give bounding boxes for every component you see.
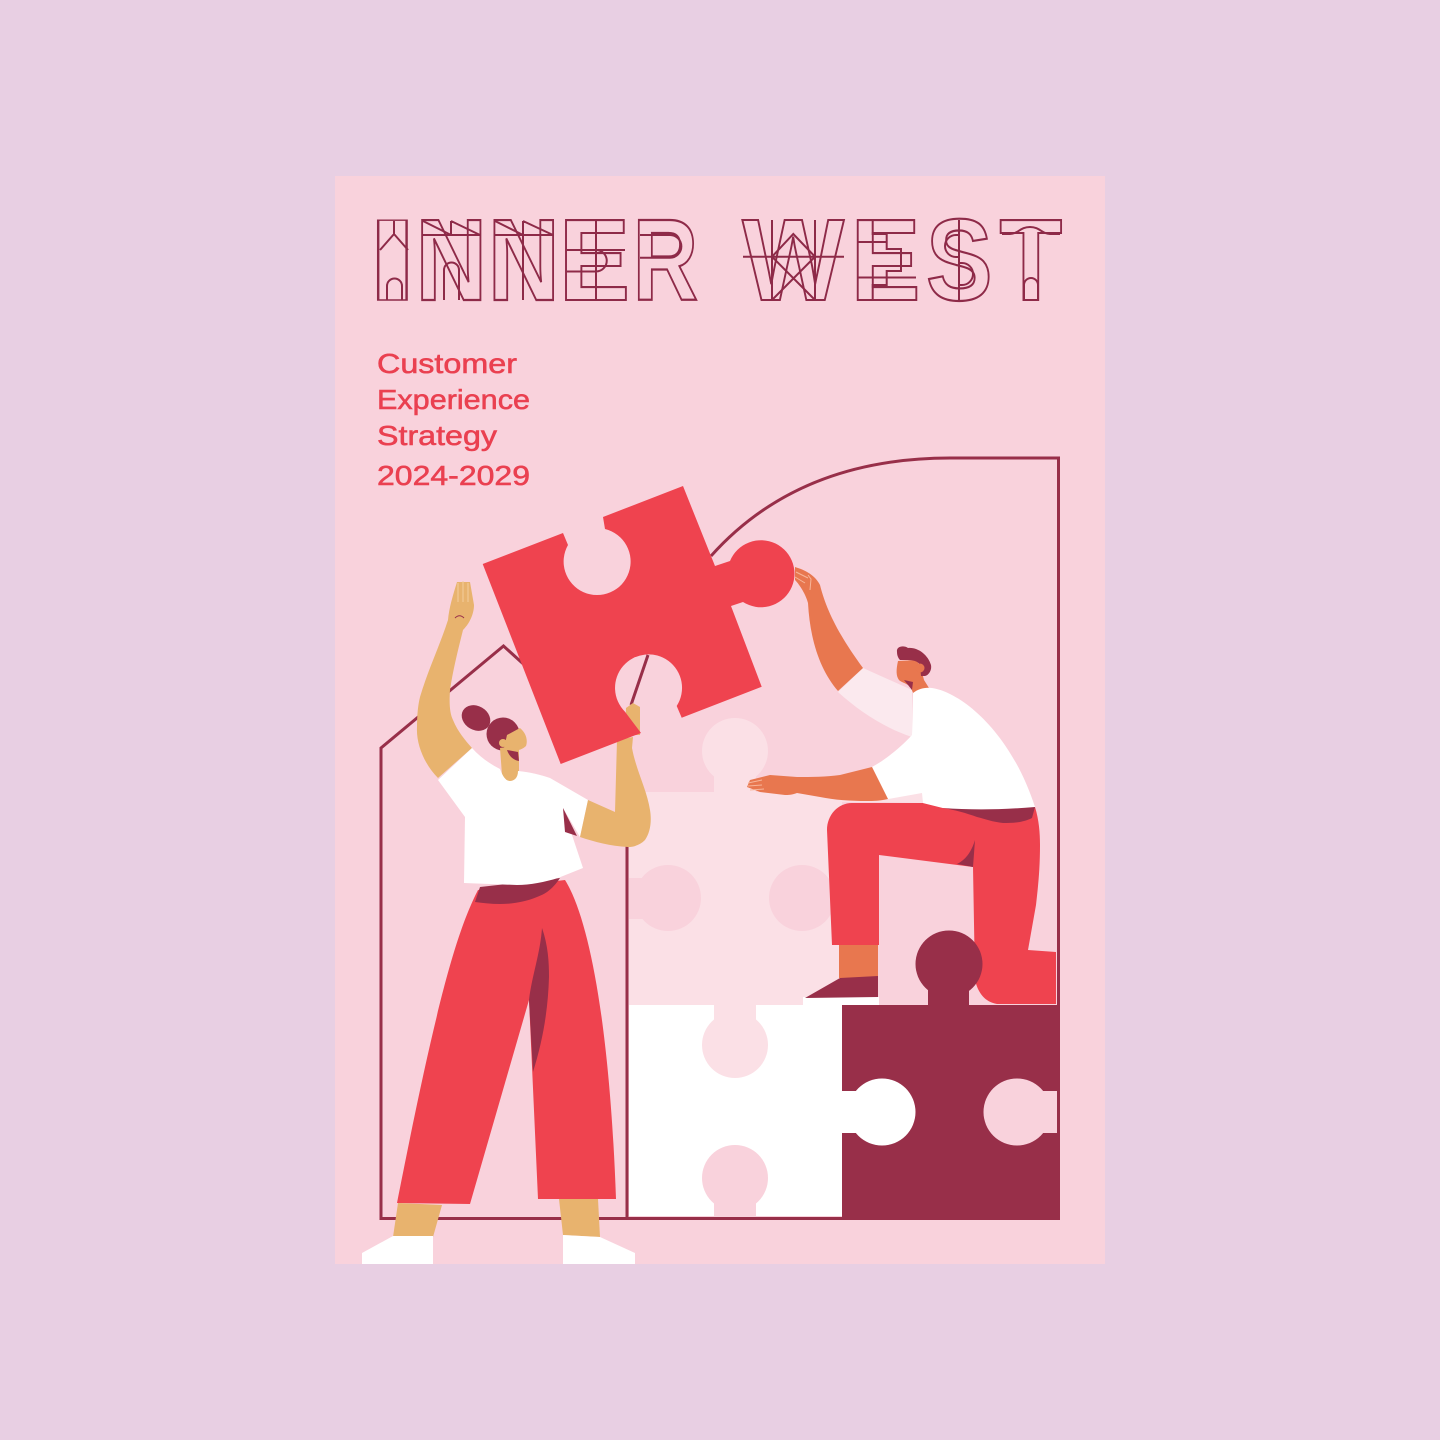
woman: raised arm <box>417 582 474 778</box>
puzzle piece: maroon <box>842 930 1060 1220</box>
title word: INNER <box>365 195 698 326</box>
woman <box>362 581 651 1264</box>
man: hand details <box>795 572 811 590</box>
woman: left ankle <box>393 1203 442 1237</box>
house outlines <box>381 458 1058 1219</box>
outline: gabled house <box>381 646 1058 1218</box>
man: pale shirt underside <box>885 792 923 803</box>
man: trouser fold <box>957 840 975 867</box>
subtitle: Customer <box>377 348 517 379</box>
title ornaments: WEST <box>743 220 1060 300</box>
woman: hair bun <box>457 700 495 736</box>
title word: WEST <box>742 195 1062 325</box>
puzzle piece: red lifted <box>483 486 794 764</box>
puzzle knob: white into maroon <box>842 1078 916 1146</box>
woman: right ankle <box>559 1199 600 1237</box>
man: shirt <box>872 688 1035 809</box>
man: ankle <box>839 945 878 978</box>
subtitle: 2024-2029 <box>377 460 530 491</box>
puzzle holes: pale upper <box>629 865 835 931</box>
woman: neck <box>500 745 519 781</box>
title word: WEST: E <box>851 196 920 325</box>
woman: palm crease <box>455 616 464 618</box>
woman: inner sleeve <box>563 808 577 836</box>
woman: smile <box>507 750 519 761</box>
woman: trouser fold <box>529 928 549 1072</box>
man: trousers <box>827 803 1056 1004</box>
woman: face <box>504 728 527 751</box>
title word: WEST: W <box>742 195 844 325</box>
woman: lower arm <box>580 737 651 847</box>
man: raised arm <box>795 567 863 691</box>
man: finger lines <box>748 780 764 790</box>
man: lower arm <box>747 767 888 801</box>
woman: hand on puzzle <box>625 703 640 735</box>
title word: WEST: S <box>926 195 993 325</box>
title word: INNER: N <box>488 195 560 325</box>
man: neck and face <box>897 660 929 697</box>
puzzle stack <box>629 718 925 1216</box>
panel: poster <box>335 176 1105 1264</box>
title word: INNER: E <box>559 195 630 325</box>
title word: INNER: I <box>365 196 420 325</box>
outline: arched house <box>711 458 1058 1219</box>
man: raised sleeve <box>838 668 912 737</box>
title word: INNER: N <box>416 195 487 325</box>
subtitle <box>377 348 530 491</box>
man: hair <box>897 646 931 676</box>
man: ear <box>916 664 924 672</box>
woman: raised hand details <box>458 581 468 602</box>
title word: WEST: T <box>1000 196 1062 325</box>
puzzle piece: pale upper <box>629 718 925 1005</box>
woman: left shoe <box>362 1236 433 1264</box>
puzzle piece: white lower <box>629 1005 842 1216</box>
woman: shirt <box>438 748 588 885</box>
subtitle: Strategy <box>377 420 497 451</box>
woman: trousers <box>397 880 616 1204</box>
white step <box>803 997 879 1005</box>
title ornaments: INNER <box>380 221 681 300</box>
title <box>365 195 1062 326</box>
woman: hair <box>486 718 520 750</box>
man: beard <box>904 680 913 690</box>
woman: right shoe <box>563 1235 635 1264</box>
puzzle hole: white bottom <box>702 1145 768 1216</box>
puzzle hole: right of maroon <box>984 1078 1057 1146</box>
man <box>747 567 1056 1004</box>
man: waist shadow <box>943 807 1035 823</box>
outline: inner wall <box>627 655 648 1218</box>
puzzle knob: pale on white <box>702 1005 768 1078</box>
woman: waist shadow <box>475 878 560 904</box>
subtitle: Experience <box>377 384 530 415</box>
man: shoe <box>805 976 878 998</box>
title word: INNER: R <box>633 196 698 326</box>
woman: ear <box>499 739 507 747</box>
